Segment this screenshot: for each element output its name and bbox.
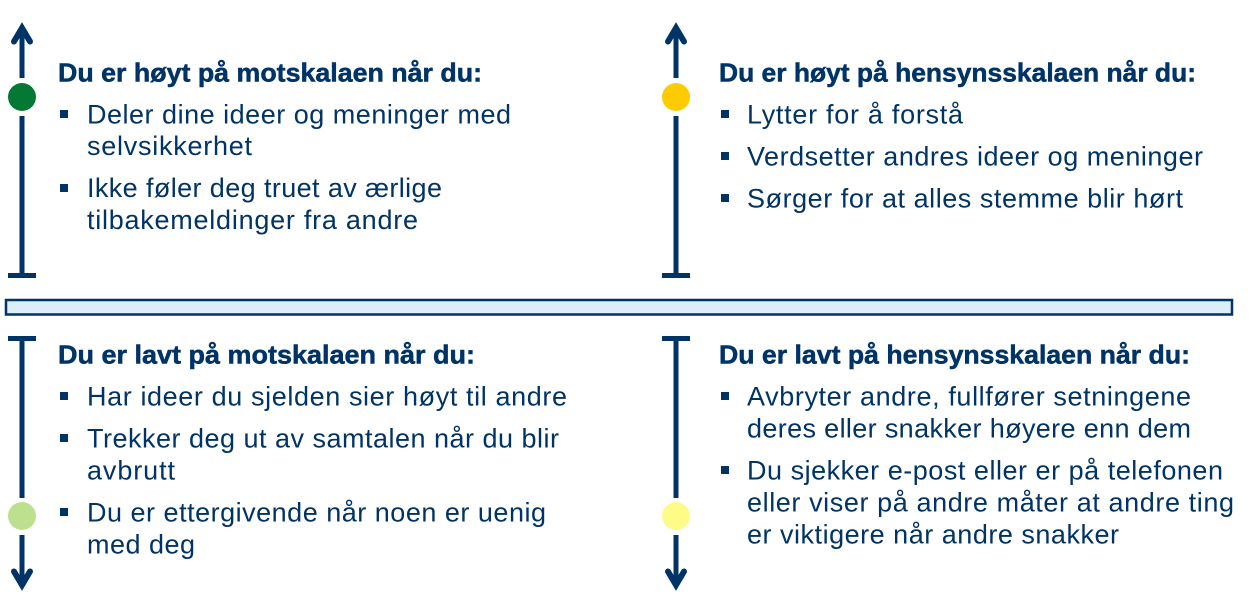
axis: high assertiveness scale (8, 28, 36, 278)
list: high assertiveness behaviours: Ikke føler deg truet av ærlige (87, 173, 442, 203)
panel: high assertiveness (8, 28, 511, 278)
list: low consideration behaviours: Avbryter andre, fullfører setningene (747, 382, 1191, 412)
list: high consideration behaviours (721, 100, 1203, 214)
list: low assertiveness behaviours: Trekker deg ut av samtalen når du blir (87, 424, 559, 454)
axis: low assertiveness scale (8, 336, 36, 585)
list: high consideration behaviours: Lytter for å forstå (747, 100, 964, 130)
list: low consideration behaviours: er viktigere når andre snakker (747, 520, 1119, 550)
divider bar (6, 300, 1232, 314)
list: high assertiveness behaviours: tilbakemeldinger fra andre (87, 205, 418, 235)
list: low consideration behaviours: Du sjekker e-post eller er på telefonen (747, 456, 1223, 486)
list: low consideration behaviours: deres eller snakker høyere enn dem (747, 414, 1191, 444)
list: high assertiveness behaviours (60, 100, 511, 235)
list: low assertiveness behaviours (60, 382, 567, 560)
axis: high consideration scale (662, 28, 690, 278)
list: low consideration behaviours (721, 382, 1234, 550)
list: low assertiveness behaviours: med deg (87, 530, 195, 560)
list: high assertiveness behaviours: Deler dine ideer og meninger med (87, 100, 511, 130)
list: high consideration behaviours: Sørger for at alles stemme blir hørt (747, 184, 1183, 214)
heading: high assertiveness: Du er høyt på motskalaen når du: (58, 58, 482, 88)
list: low assertiveness behaviours: avbrutt (87, 456, 175, 486)
panel: low assertiveness (8, 336, 567, 585)
heading: low consideration: Du er lavt på hensynsskalaen når du: (719, 340, 1190, 370)
axis: low consideration scale (662, 336, 690, 585)
list: low assertiveness behaviours: Du er ettergivende når noen er uenig (87, 498, 546, 528)
list: high consideration behaviours: Verdsetter andres ideer og meninger (747, 142, 1203, 172)
list: low assertiveness behaviours: Har ideer du sjelden sier høyt til andre (87, 382, 567, 412)
panel: low consideration (662, 336, 1234, 585)
panel: high consideration (662, 28, 1203, 278)
heading: low assertiveness: Du er lavt på motskalaen når du: (58, 340, 475, 370)
list: low consideration behaviours: eller viser på andre måter at andre ting (747, 488, 1234, 518)
heading: high consideration: Du er høyt på hensynsskalaen når du: (719, 58, 1196, 88)
list: high assertiveness behaviours: selvsikkerhet (87, 131, 252, 161)
